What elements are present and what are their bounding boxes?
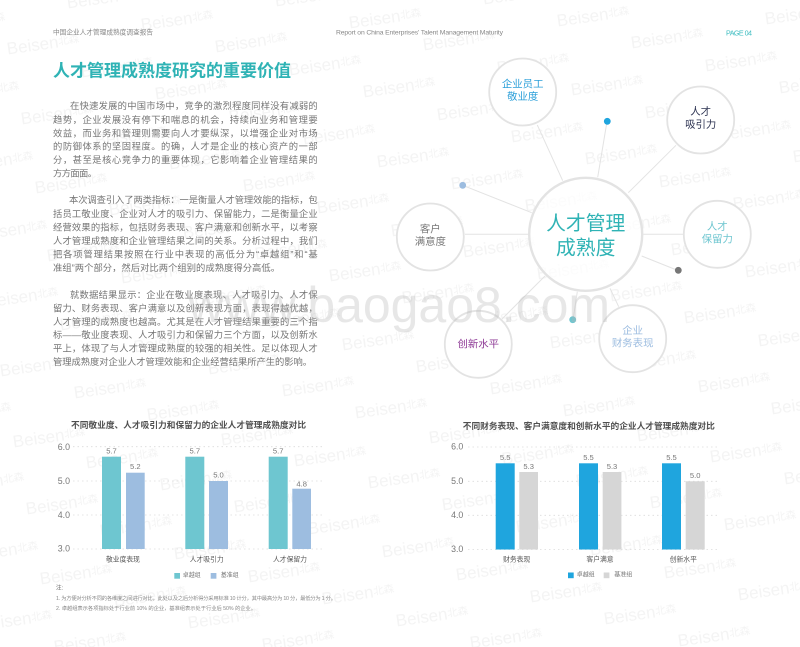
- legend: [174, 571, 239, 579]
- footnotes: 1. 为方便对分析不同的各维度之间进行对比，此处以及之后分析得分采用标准 10 计分，其中最高分为 10 分，最低分为 1 分。: [56, 594, 336, 602]
- text: Beisen北森: [46, 236, 121, 266]
- text: Beisen北森: [570, 70, 645, 100]
- node: employee engagement: 敬业度: [507, 90, 538, 103]
- text: Beisen北森: [108, 190, 183, 220]
- text: Beisen北森: [146, 395, 221, 425]
- node: customer satisfaction: [397, 204, 464, 270]
- text: Beisen北森: [603, 599, 678, 629]
- text: Beisen北森: [598, 209, 673, 239]
- text: Beisen北森: [220, 420, 295, 450]
- text: Beisen北森: [562, 391, 637, 421]
- body text: [53, 100, 318, 367]
- radial diagram: talent management maturity: [397, 58, 751, 378]
- value labels: 5.2: [130, 462, 141, 471]
- running header: 中国企业人才管理成熟度调查报告: [53, 28, 153, 36]
- category labels: 财务表现: [503, 554, 530, 564]
- text: Beisen北森: [524, 186, 599, 216]
- value labels: 5.7: [106, 446, 117, 456]
- value labels: 5.3: [607, 462, 617, 471]
- node: talent attraction: [667, 86, 734, 154]
- body text: 的防御体系的坚固程度。的确，人才是企业的核心资产的一部: [53, 141, 318, 152]
- text: Beisen北森: [376, 142, 451, 172]
- axis and grid: 6.0: [58, 442, 70, 452]
- legend: 卓越组: [577, 570, 595, 578]
- body text: 留力、财务表现、客户满意以及创新表现方面，表现得越优越，: [53, 302, 318, 314]
- legend: [568, 570, 632, 578]
- text: Beisen北森: [214, 27, 289, 57]
- body text: 趋势，企业发展没有停下和喘息的机会，持续向业务和管理要: [53, 114, 318, 125]
- body text: 在快速发展的中国市场中，竞争的激烈程度同样没有减弱的: [70, 100, 318, 111]
- text: Beisen北森: [381, 532, 456, 562]
- text: Beisen北森: [99, 511, 174, 541]
- node: financial performance: 财务表现: [612, 336, 653, 350]
- text: Beisen北森: [254, 234, 329, 264]
- axis and grid: 3.0: [58, 544, 70, 554]
- text: Beisen北森: [328, 256, 403, 286]
- text: Beisen北森: [288, 50, 363, 80]
- axis and grid: 5.0: [58, 476, 70, 486]
- text: Beisen北森: [168, 144, 243, 174]
- text: Beisen北森: [120, 258, 195, 288]
- text: Beisen北森: [428, 418, 503, 448]
- accent dots: [459, 118, 682, 323]
- text: Beisen北森: [395, 601, 470, 631]
- text: Beisen北森: [589, 530, 664, 560]
- text: Beisen北森: [475, 301, 550, 331]
- text: Beisen北森: [609, 276, 684, 306]
- category labels: [106, 554, 307, 564]
- text: Beisen北森: [658, 162, 733, 192]
- text: Beisen北森: [455, 555, 530, 585]
- text: Beisen北森: [6, 29, 81, 59]
- value labels: 5.5: [583, 453, 594, 462]
- text: Beisen北森: [718, 115, 793, 145]
- value labels: 5.5: [500, 453, 510, 462]
- text: Beisen北森: [670, 230, 745, 260]
- value labels: 5.0: [213, 470, 224, 480]
- text: Beisen北森: [496, 48, 571, 78]
- text: Beisen北森: [59, 305, 134, 335]
- right bar chart: [451, 420, 718, 578]
- axis and grid: 3.0: [451, 544, 463, 554]
- text: Beisen北森: [140, 5, 215, 35]
- node: talent retention: 人才: [707, 220, 728, 233]
- value labels: 5.7: [190, 446, 200, 456]
- text: Beisen北森: [267, 303, 342, 333]
- body text: 把各项管理结果按照在行业中表现的高低分为“卓越组”和“基: [53, 248, 318, 259]
- axis and grid: 4.0: [451, 510, 463, 520]
- text: Beisen北森: [281, 371, 356, 401]
- text: Beisen北森: [584, 139, 659, 169]
- node: employee engagement: 企业员工: [502, 78, 543, 90]
- body text: 管理成熟度对企业人才管理效能和企业经营结果所产生的影响。: [53, 356, 312, 367]
- text: Beisen北森: [173, 534, 248, 564]
- text: Beisen北森: [401, 278, 476, 308]
- node: financial performance: [599, 305, 666, 372]
- text: Beisen北森: [663, 553, 738, 583]
- text: Beisen北森: [510, 117, 585, 147]
- text: Beisen北森: [575, 461, 650, 491]
- text: Beisen北森: [293, 441, 368, 471]
- text: Beisen北森: [644, 93, 719, 123]
- text: Beisen北森: [683, 298, 758, 328]
- text: Beisen北森: [159, 465, 234, 495]
- running header: Report on China Enterprises' Talent Management Maturity: [336, 30, 504, 36]
- text: Beisen北森: [85, 443, 160, 473]
- text: Beisen北森: [34, 168, 109, 198]
- legend: 卓越组: [183, 571, 201, 579]
- text: Beisen北森: [441, 485, 516, 515]
- text: Beisen北森: [709, 437, 784, 467]
- node: talent retention: 保留力: [702, 232, 733, 246]
- center node: 成熟度: [556, 237, 616, 259]
- text: Beisen北森: [704, 46, 779, 76]
- site watermark: www.baogao8.com: [187, 277, 610, 333]
- body text: 括员工敬业度、企业对人才的吸引力、保留能力，二是衡量企业: [53, 208, 318, 219]
- axis and grid: 5.0: [451, 476, 463, 486]
- text: Beisen北森: [390, 211, 465, 241]
- page title: 人才管理成熟度研究的重要价值: [53, 60, 291, 80]
- text: Beisen北森: [316, 188, 391, 218]
- text: Beisen北森: [556, 1, 631, 31]
- text: Beisen北森: [636, 416, 711, 446]
- text: Beisen北森: [723, 505, 798, 535]
- category labels: 创新水平: [670, 554, 697, 564]
- node: innovation: 创新水平: [458, 338, 499, 350]
- text: Beisen北森: [623, 345, 698, 375]
- chart title: 不同敬业度、人才吸引力和保留力的企业人才管理成熟度对比: [71, 419, 306, 430]
- text: Beisen北森: [154, 74, 229, 104]
- running header: PAGE 04: [726, 28, 752, 38]
- text: Beisen北森: [207, 349, 282, 379]
- text: Beisen北森: [302, 119, 377, 149]
- center node: [529, 178, 642, 291]
- text: Beisen北森: [515, 507, 590, 537]
- body text: 平上，体现了与人才管理成熟度的较强的相关性。足以体现人才: [53, 342, 318, 354]
- text: Beisen北森: [73, 373, 148, 403]
- footnotes: 注:: [56, 583, 64, 591]
- node: innovation: [445, 311, 512, 378]
- node: talent retention: [684, 201, 751, 268]
- text: Beisen北森: [450, 164, 525, 194]
- category labels: [503, 554, 697, 564]
- body text: 方方面面。: [53, 167, 97, 178]
- axis and grid: 6.0: [451, 442, 463, 452]
- node: financial performance: 企业: [622, 324, 643, 337]
- body text: 效益，而业务和管理则需要向人才要纵深，以增强企业对市场: [53, 127, 318, 138]
- axis and grid: [58, 442, 324, 554]
- bars: [496, 463, 705, 550]
- node: talent attraction: 吸引力: [685, 118, 716, 131]
- value labels: 5.3: [523, 462, 534, 471]
- text: Beisen北森: [649, 483, 724, 513]
- axis and grid: 4.0: [58, 510, 70, 520]
- left bar chart: [58, 419, 324, 579]
- node: customer satisfaction: 客户: [420, 222, 441, 236]
- text: Beisen北森: [233, 487, 308, 517]
- running header: [53, 28, 752, 38]
- body text: 标——敬业度表现、人才吸引力和保留力三个方面，以及创新水: [53, 329, 318, 340]
- text: Beisen北森: [501, 439, 576, 469]
- legend: 基准组: [221, 571, 239, 579]
- body text: 人才管理的成熟度也越高。尤其是在人才管理结果重要的三个指: [53, 316, 318, 327]
- text: Beisen北森: [436, 95, 511, 125]
- body text: 经营效果的指标，包括财务表现、客户满意和创新水平，以考察: [53, 222, 318, 232]
- text: Beisen北森: [415, 347, 490, 377]
- text: Beisen北森: [362, 72, 437, 102]
- text: Beisen北森: [133, 327, 208, 357]
- category labels: 人才保留力: [273, 554, 307, 564]
- value labels: [500, 453, 700, 480]
- text: Beisen北森: [529, 577, 604, 607]
- text: Beisen北森: [12, 422, 87, 452]
- text: Beisen北森: [0, 351, 74, 381]
- body text: 就数据结果显示：企业在敬业度表现、人才吸引力、人才保: [70, 289, 318, 300]
- value labels: 4.8: [296, 480, 307, 488]
- text: Beisen北森: [25, 489, 100, 519]
- value labels: 5.7: [273, 446, 283, 456]
- text: Beisen北森: [630, 23, 705, 53]
- node: talent attraction: 人才: [690, 105, 711, 118]
- body text: 准组”两个部分，然后对比两个组别的成熟度得分高低。: [53, 262, 280, 273]
- body text: 分，甚至是核心竞争力的重要体现，它影响着企业管理结果的: [53, 154, 318, 165]
- category labels: 敬业度表现: [106, 554, 140, 564]
- value labels: 5.5: [666, 453, 677, 462]
- text: Beisen北森: [113, 581, 188, 611]
- text: Beisen北森: [489, 369, 564, 399]
- category labels: 客户满意: [586, 554, 614, 564]
- text: Beisen北森: [80, 52, 155, 82]
- text: Beisen北森: [242, 166, 317, 196]
- chart title: 不同财务表现、客户满意度和创新水平的企业人才管理成熟度对比: [463, 420, 715, 431]
- text: Beisen北森: [182, 213, 257, 243]
- bars: [102, 457, 311, 549]
- node: employee engagement: [489, 58, 556, 126]
- value labels: 5.0: [690, 471, 700, 480]
- body text: 本次调查引入了两类指标：一是衡量人才管理效能的指标，包: [69, 194, 318, 205]
- text: Beisen北森: [341, 325, 416, 355]
- text: Beisen北森: [536, 254, 611, 284]
- text: Beisen北森: [348, 3, 423, 33]
- text: Beisen北森: [228, 97, 303, 127]
- text: Beisen北森: [247, 557, 322, 587]
- text: Beisen北森: [20, 99, 95, 129]
- text: Beisen北森: [354, 393, 429, 423]
- text: Beisen北森: [187, 603, 262, 633]
- text: Beisen北森: [321, 579, 396, 609]
- category labels: 人才吸引力: [190, 554, 224, 564]
- text: Beisen北森: [193, 280, 268, 310]
- body text: 人才管理成熟度和企业管理结果之间的关系。分析过程中，我们: [53, 235, 318, 246]
- text: Beisen北森: [94, 121, 169, 151]
- text: Beisen北森: [307, 509, 382, 539]
- footnotes: 2. 卓越组表示各项指标处于行业前 10% 的企业，基准组表示处于行业后 50% 的企业。: [56, 604, 256, 612]
- text: Beisen北森: [697, 367, 772, 397]
- text: Beisen北森: [549, 323, 624, 353]
- text: Beisen北森: [422, 25, 497, 55]
- text: Beisen北森: [39, 559, 114, 589]
- axis and grid: [451, 442, 718, 554]
- center node: 人才管理: [546, 213, 625, 235]
- node: customer satisfaction: 满意度: [415, 235, 446, 248]
- legend: 基准组: [614, 570, 632, 578]
- footnotes: [56, 583, 336, 612]
- text: Beisen北森: [367, 463, 442, 493]
- text: Beisen北森: [462, 232, 537, 262]
- value labels: [106, 446, 307, 488]
